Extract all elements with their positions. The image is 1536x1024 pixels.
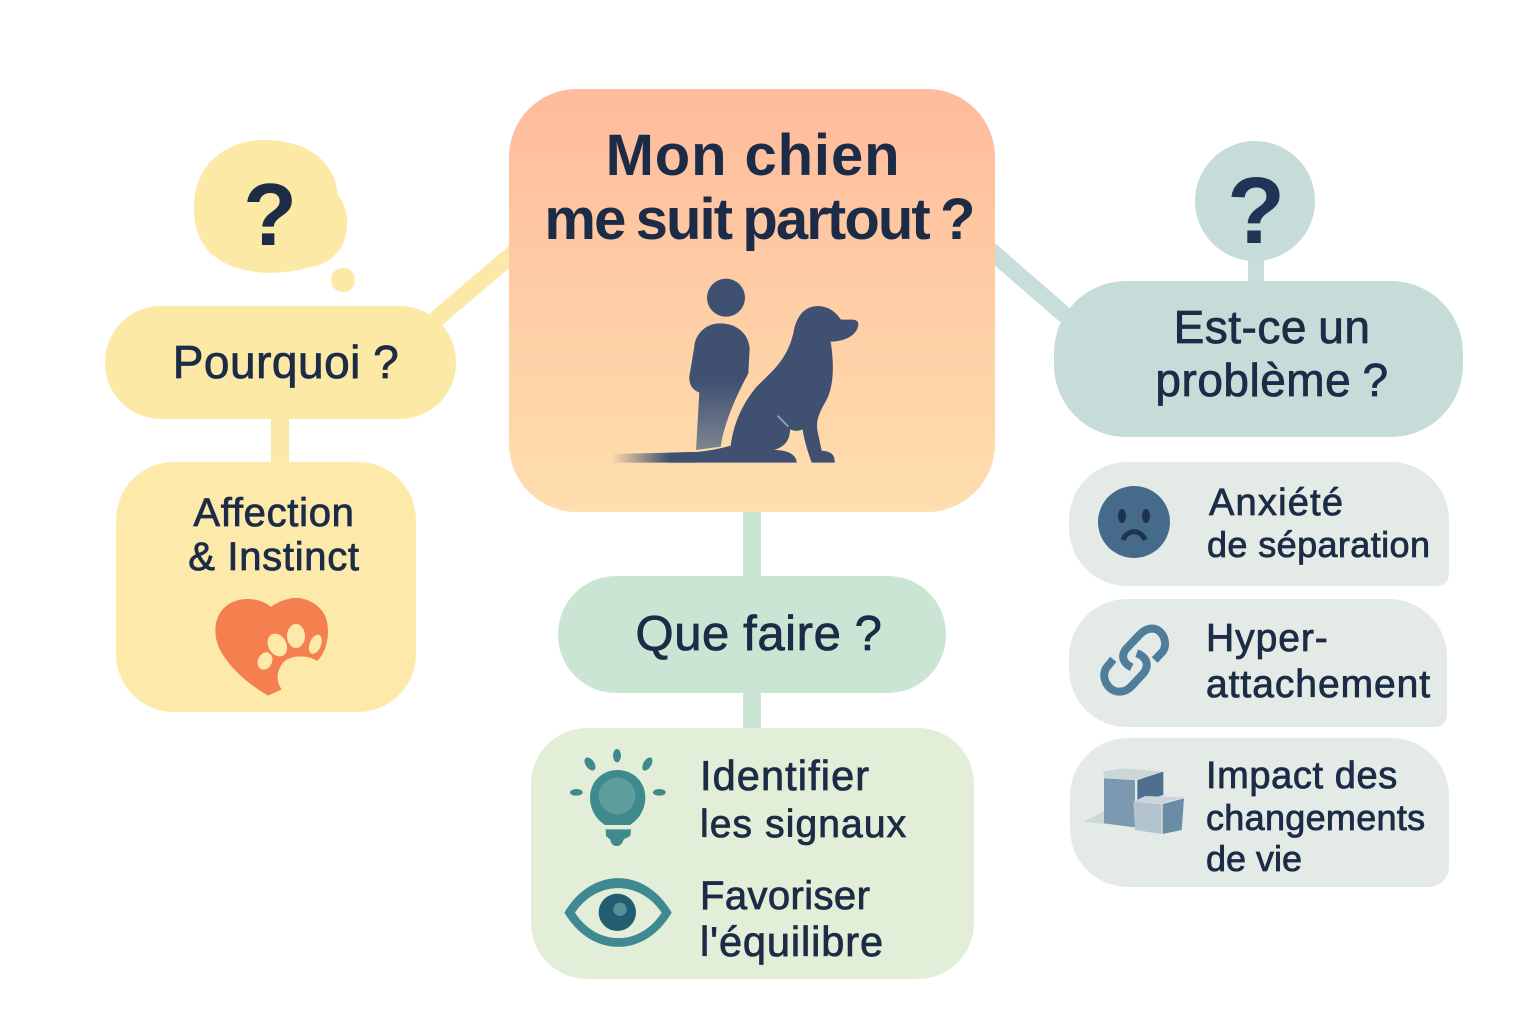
icon: thought bubble question: ? bbox=[243, 165, 297, 264]
text: affection: & Instinct bbox=[188, 535, 360, 579]
text: hyper-attachement: attachement bbox=[1206, 663, 1431, 706]
text: anxiete bbox=[1207, 482, 1430, 565]
text: favoriser: l'équilibre bbox=[700, 918, 884, 965]
text: favoriser bbox=[700, 874, 884, 965]
heading: que faire: Que faire ? bbox=[635, 607, 883, 661]
title: me suit partout ? bbox=[544, 187, 974, 252]
text: anxiete: Anxiété bbox=[1209, 482, 1344, 524]
panel: anxiete bbox=[1069, 462, 1449, 586]
icon: heart with paw bbox=[215, 598, 328, 696]
text: impact: changements bbox=[1206, 797, 1425, 838]
heading: est-ce un probleme: Est-ce un bbox=[1174, 301, 1370, 353]
icon: eye bbox=[564, 878, 672, 947]
icon: question circle bbox=[1195, 141, 1315, 264]
text: identifier bbox=[700, 752, 907, 846]
heading: pourquoi: Pourquoi ? bbox=[173, 336, 399, 388]
text: affection: Affection bbox=[193, 491, 355, 535]
panel: impact bbox=[1070, 738, 1449, 887]
text: anxiete: de séparation bbox=[1207, 524, 1430, 565]
panel: actions bbox=[531, 728, 974, 979]
panel: que faire bbox=[558, 576, 946, 693]
text: impact: Impact des bbox=[1206, 755, 1398, 797]
text: impact bbox=[1206, 755, 1425, 879]
heading: est-ce un probleme: problème ? bbox=[1155, 354, 1389, 406]
panel: est-ce un probleme bbox=[1054, 281, 1463, 437]
icon: boxes bbox=[1084, 768, 1184, 834]
panel: central title bbox=[509, 89, 995, 512]
heading: est-ce un probleme bbox=[1155, 301, 1389, 406]
text: hyper-attachement bbox=[1206, 617, 1431, 706]
icon: sad face bbox=[1098, 486, 1170, 558]
text: identifier: les signaux bbox=[700, 803, 907, 846]
panel: hyper-attachement bbox=[1069, 599, 1447, 727]
panel: affection bbox=[116, 462, 416, 712]
title bbox=[544, 123, 974, 252]
text: affection bbox=[188, 491, 360, 579]
text: hyper-attachement: Hyper- bbox=[1206, 617, 1329, 660]
icon: person and dog bbox=[614, 278, 858, 463]
icon: light bulb bbox=[570, 749, 666, 846]
text: favoriser: Favoriser bbox=[700, 874, 870, 918]
text: impact: de vie bbox=[1206, 838, 1302, 879]
icon: thought bubble question bbox=[194, 140, 355, 292]
icon: question circle: ? bbox=[1227, 158, 1285, 264]
icon: chain link bbox=[1100, 624, 1170, 696]
title: Mon chien bbox=[606, 123, 900, 188]
text: identifier: Identifier bbox=[700, 752, 870, 799]
panel: pourquoi bbox=[105, 306, 456, 419]
